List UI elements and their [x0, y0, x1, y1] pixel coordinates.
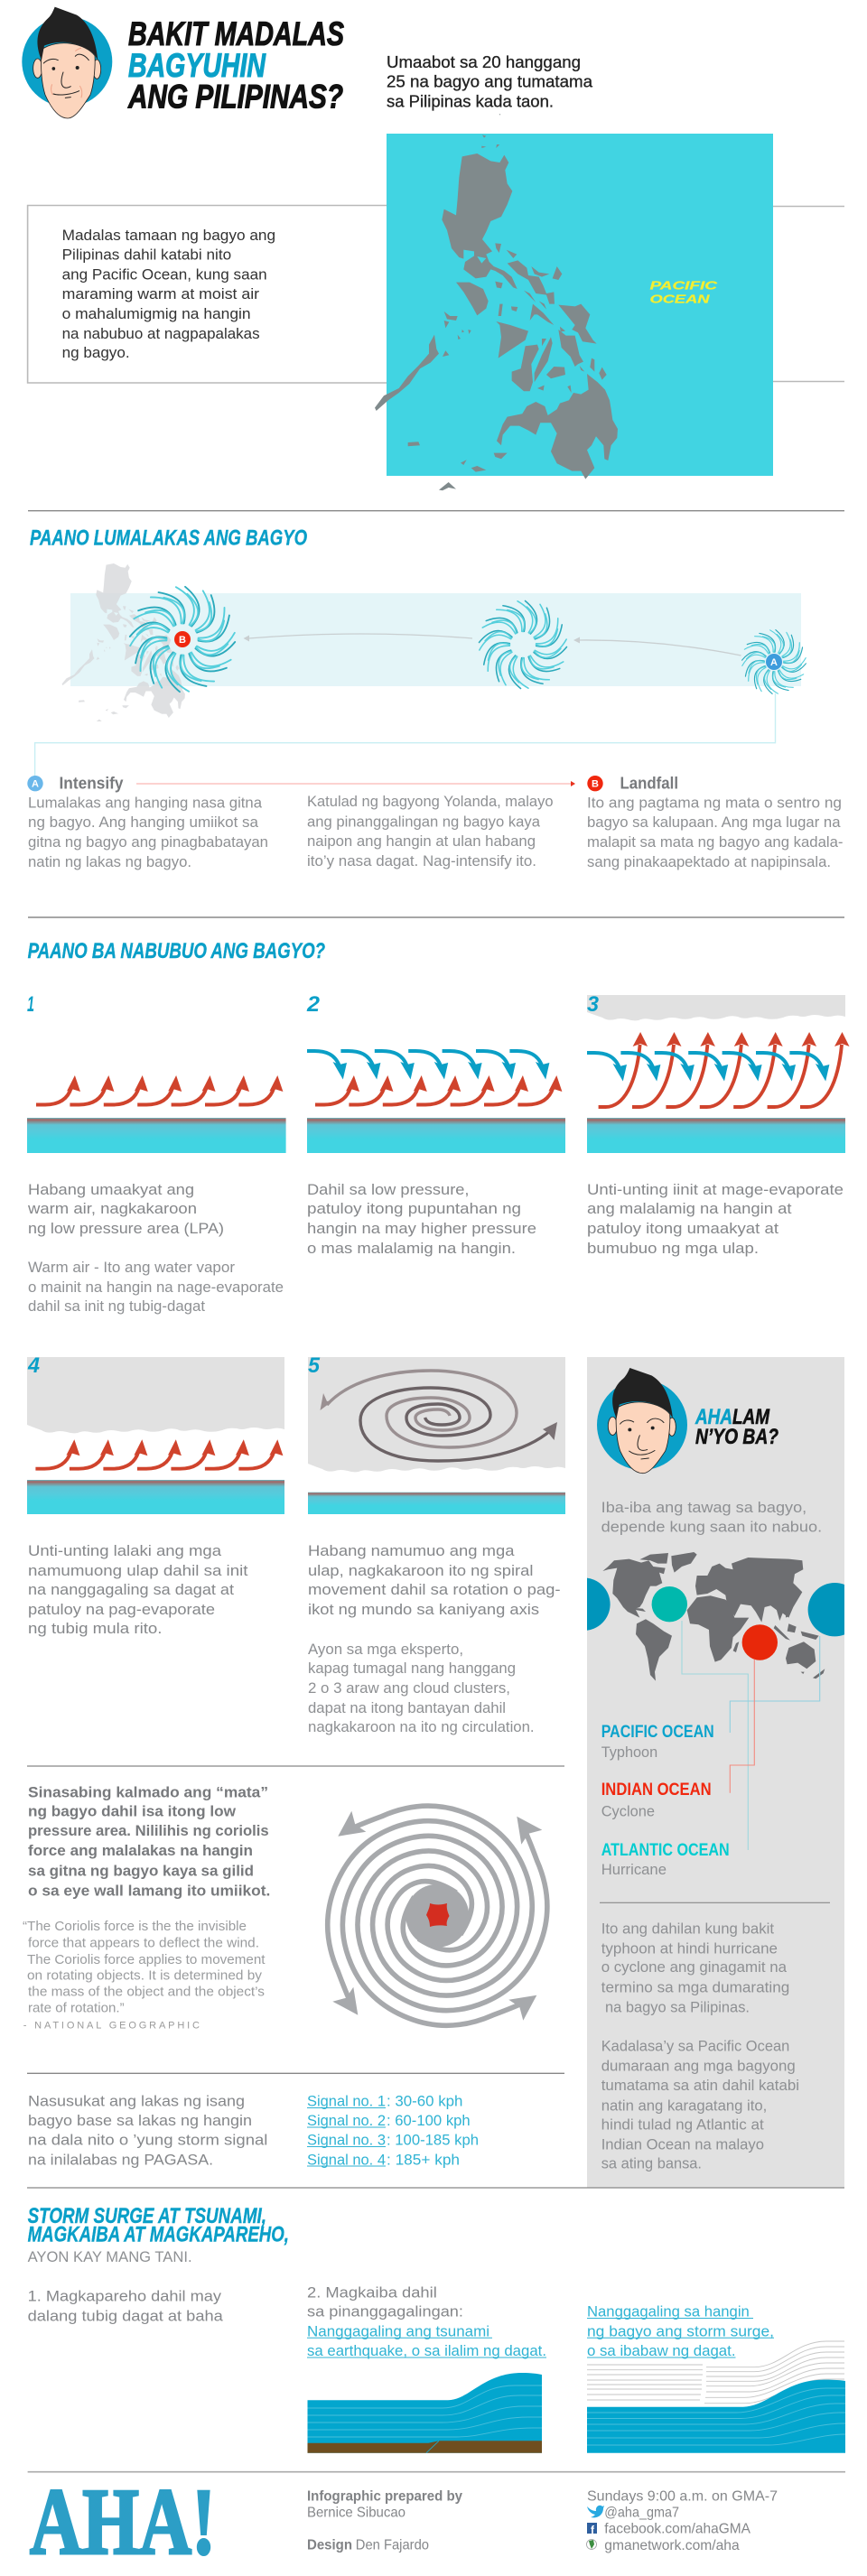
text: step 3: ang malalamig na hangin at — [587, 1200, 792, 1217]
list: signal numbers: Signal no. 3 — [307, 2132, 386, 2149]
text: difference: 2. Magkaiba dahil — [307, 2283, 437, 2301]
panel: explanation box outline — [28, 206, 844, 383]
map: world — [602, 1552, 825, 1681]
text: storm surge origin: o sa ibabaw ng dagat. — [587, 2342, 735, 2359]
intro text: typhoon count — [387, 53, 593, 110]
heading: storm surge and tsunami: STORM SURGE AT TSUNAMI, — [28, 2204, 266, 2228]
list: signal numbers: Signal no. 1 — [307, 2093, 386, 2110]
text: Yolanda: naipon ang hangin at ulan habang — [307, 832, 536, 850]
intro text: typhoon count: Umaabot sa 20 hanggang — [387, 53, 581, 71]
text: step 2: Dahil sa low pressure, — [307, 1181, 470, 1198]
number 3: 3 — [587, 992, 600, 1017]
text: why typhoon: termino sa mga dumarating — [601, 1979, 789, 1996]
text: why Philippines is hit: ang Pacific Ocean, kung saan — [62, 265, 267, 284]
icon: facebook: f — [591, 2524, 595, 2536]
text: storm signal intro: na inilalabas ng PAGASA. — [28, 2151, 213, 2168]
ocean markers — [587, 1578, 844, 1660]
text: step 3: Unti-unting iinit at mage-evaporate — [587, 1181, 844, 1198]
step 2 diagram — [307, 1051, 565, 1153]
text: step 1: Warm air - Ito ang water vapor — [28, 1259, 235, 1276]
text: why typhoon: natin ang karagatang ito, — [601, 2097, 767, 2114]
text: why Philippines is hit: ng bagyo. — [62, 344, 130, 361]
arrows: storm movement — [244, 634, 741, 656]
text: intensify: gitna ng bagyo ang pinagbabatayan — [28, 833, 268, 851]
text: step 5: ikot ng mundo sa kaniyang axis — [308, 1601, 539, 1618]
text: why typhoon: na bagyo sa Pilipinas. — [605, 1998, 750, 2015]
text: step 5: 2 o 3 araw ang cloud clusters, — [308, 1679, 510, 1697]
text: eye of the storm: o sa eye wall lamang ito umiikot. — [28, 1882, 270, 1899]
text: intensify — [28, 795, 268, 870]
text: landfall — [587, 795, 844, 870]
swirl: middle stage — [478, 600, 568, 690]
swirl: intensify stage — [741, 628, 807, 695]
text: Yolanda: Katulad ng bagyong Yolanda, malayo — [307, 793, 553, 810]
number 5: 5 — [308, 1353, 321, 1378]
step 4 diagram — [27, 1357, 284, 1514]
text: why Philippines is hit: Pilipinas dahil katabi nito — [62, 246, 231, 264]
text: why typhoon: Kadalasa’y sa Pacific Ocean — [601, 2038, 789, 2055]
leader lines — [682, 1621, 820, 1850]
text: step 5: nagkakaroon na ito ng circulation. — [308, 1718, 535, 1735]
icon: facebook — [587, 2523, 597, 2536]
text: storm surge origin: Nanggagaling sa hangin — [587, 2303, 750, 2320]
connector line — [35, 693, 776, 777]
text: step 2: patuloy itong pupuntahan ng — [307, 1200, 521, 1217]
heading: storm surge and tsunami: MAGKAIBA AT MAGKAPAREHO, — [28, 2223, 289, 2247]
text: eye of the storm: sa gitna ng bagyo kaya sa gilid — [28, 1862, 254, 1879]
panel: Ahalam n'yo ba sidebar — [587, 1357, 844, 2187]
text: step 1: o mainit na hangin na nage-evaporate — [28, 1279, 284, 1296]
text: intensify: Lumalakas ang hanging nasa gitna — [28, 795, 263, 811]
title: BAKIT MADALAS — [128, 15, 344, 52]
label: B Landfall: B — [592, 779, 599, 790]
text: similarity — [28, 2287, 223, 2325]
text: eye of the storm: force ang malalakas na hangin — [28, 1842, 253, 1859]
map: Philippines on Pacific Ocean: OCEAN — [650, 293, 711, 305]
heading: Paano lumalakas: PAANO LUMALAKAS ANG BAGYO — [30, 525, 307, 551]
text: step 5: dapat na itong bantayan dahil — [308, 1699, 506, 1716]
credits: Bernice Sibucao — [307, 2505, 406, 2520]
legend: oceans and storm names: Cyclone — [601, 1803, 655, 1820]
storm eye — [426, 1903, 450, 1927]
text: step 5: ulap, nagkakaroon ito ng spiral — [308, 1562, 533, 1579]
text: step 4 — [28, 1542, 248, 1637]
chart: tsunami cross-section — [307, 2373, 542, 2453]
wind lines — [587, 2341, 844, 2404]
step 5 diagram — [308, 1357, 565, 1514]
title: Ahalam n'yo ba: AHA — [695, 1405, 732, 1429]
text: step 1: dahil sa init ng tubig-dagat — [28, 1297, 205, 1315]
text: storm signal intro: bagyo base sa lakas ng hangin — [28, 2112, 252, 2129]
quote: National Geographic: - NATIONAL GEOGRAPHIC — [23, 2021, 200, 2032]
text: difference: Nanggagaling ang tsunami — [307, 2322, 489, 2339]
logo: AHA!: AHA! — [30, 2469, 216, 2574]
text: names differ — [601, 1499, 822, 1536]
legend: oceans and storm names: Hurricane — [601, 1861, 667, 1878]
text: storm surge origin: ng bagyo ang storm surge, — [587, 2322, 774, 2339]
text: step 1 — [27, 1181, 284, 1315]
legend: oceans and storm names: PACIFIC OCEAN — [601, 1723, 714, 1742]
text: why typhoon: hindi tulad ng Atlantic at — [601, 2116, 764, 2133]
track diagram: typhoon path — [61, 563, 806, 721]
text: why Philippines is hit: na nabubuo at nagpapalakas — [62, 325, 260, 342]
credits: Den Fajardo — [356, 2537, 429, 2553]
text: eye of the storm: ng bagyo dahil isa itong low — [28, 1803, 237, 1820]
text: why typhoon — [601, 1920, 799, 2172]
credits: Design — [307, 2537, 352, 2553]
text: names differ: depende kung saan ito nabuo. — [601, 1519, 822, 1536]
legend: oceans and storm names: INDIAN OCEAN — [601, 1781, 712, 1799]
intro text: typhoon count: sa Pilipinas kada taon. — [387, 92, 554, 110]
show and social links — [587, 2488, 778, 2553]
text: storm signal intro — [28, 2093, 267, 2168]
quote: National Geographic: force that appears to deflect the wind. — [28, 1937, 259, 1951]
text: eye of the storm — [28, 1784, 270, 1899]
title: BAGYUHIN — [128, 47, 266, 84]
text: storm signal intro: Nasusukat ang lakas ng isang — [28, 2093, 245, 2110]
text: Yolanda: ang pinanggalingan ng bagyo kaya — [307, 813, 541, 831]
text: similarity: 1. Magkapareho dahil may — [28, 2287, 222, 2304]
avatar: smiling host face — [597, 1368, 687, 1474]
quote: National Geographic: the mass of the object and the object’s — [28, 1985, 265, 2000]
list: signal numbers: : 185+ kph — [387, 2151, 460, 2168]
show and social links: facebook.com/ahaGMA — [604, 2521, 750, 2536]
text: step 3: patuloy itong umaakyat at — [587, 1220, 778, 1237]
text: step 4: ng tubig mula rito. — [28, 1620, 163, 1637]
text: eye of the storm: pressure area. Nililihis ng coriolis — [28, 1822, 269, 1839]
icon: globe — [587, 2539, 596, 2550]
icon: twitter — [587, 2506, 604, 2517]
quote: National Geographic: rate of rotation.” — [28, 2002, 125, 2016]
chart: storm surge cross-section — [587, 2341, 845, 2453]
avatar: worried host face — [22, 7, 112, 118]
text: why typhoon: dumaraan ang mga bagyong — [601, 2057, 796, 2074]
map: Philippines on Pacific Ocean: PACIFIC — [650, 280, 718, 293]
heading: Paano nabubuo: PAANO BA NABUBUO ANG BAGYO? — [28, 939, 325, 963]
heading: storm surge and tsunami: AYON KAY MANG TANI. — [28, 2248, 192, 2265]
title: Ahalam n'yo ba: N’YO BA? — [695, 1425, 778, 1449]
text: why Philippines is hit: maraming warm at moist air — [62, 285, 259, 302]
text: step 4: na nanggagaling sa dagat at — [28, 1581, 234, 1598]
text: eye of the storm: Sinasabing kalmado ang “mata” — [28, 1784, 268, 1801]
quote: National Geographic: on rotating objects. It is determined by — [27, 1969, 263, 1984]
step 1 diagram — [27, 1075, 286, 1153]
text: step 5: Ayon sa mga eksperto, — [308, 1641, 463, 1658]
quote: National Geographic: “The Coriolis force is the the invisible — [23, 1920, 247, 1934]
quote: National Geographic — [23, 1920, 266, 2032]
list: signal numbers: : 100-185 kph — [387, 2132, 479, 2149]
text: step 4: namumuong ulap dahil sa init — [28, 1562, 248, 1579]
text: why typhoon: tumatama sa atin dahil katabi — [601, 2077, 799, 2094]
text: names differ: Iba-iba ang tawag sa bagyo, — [601, 1499, 806, 1516]
text: why typhoon: o cyclone ang ginagamit na — [601, 1958, 788, 1976]
list: signal numbers: Signal no. 2 — [307, 2112, 386, 2129]
list: signal numbers: : 60-100 kph — [387, 2112, 471, 2129]
number 1: 1 — [27, 992, 34, 1017]
text: difference: sa pinanggagalingan: — [307, 2303, 463, 2320]
text: step 5: kapag tumagal nang hanggang — [308, 1660, 516, 1677]
text: why typhoon: Ito ang dahilan kung bakit — [601, 1920, 774, 1938]
seabed with fault — [307, 2441, 542, 2453]
text: step 3: bumubuo ng mga ulap. — [587, 1240, 759, 1257]
text: landfall: sang pinakaapektado at napipinsala. — [587, 853, 831, 870]
heading: storm surge and tsunami — [28, 2204, 289, 2265]
swirl: landfall stage: B — [179, 635, 186, 646]
map: Philippines on Pacific Ocean — [375, 114, 773, 490]
text: step 2: o mas malalamig na hangin. — [307, 1240, 516, 1257]
text: why Philippines is hit: Madalas tamaan ng bagyo ang — [62, 227, 275, 244]
label: A Intensify: A — [32, 779, 39, 790]
label: B Landfall: Landfall — [620, 775, 678, 793]
label: B Landfall — [587, 775, 678, 793]
arrow: intensify to landfall — [136, 781, 575, 786]
show and social links: Sundays 9:00 a.m. on GMA-7 — [587, 2488, 778, 2504]
swirl: landfall stage — [127, 584, 238, 694]
title — [127, 15, 344, 116]
text: step 1: Habang umaakyat ang — [28, 1181, 194, 1198]
text: step 5: movement dahil sa rotation o pag- — [308, 1581, 561, 1598]
spiral: dark arm — [360, 1388, 557, 1461]
text: why Philippines is hit: o mahalumigmig na hangin — [62, 305, 251, 322]
intro text: typhoon count: 25 na bagyo ang tumatama — [387, 72, 593, 90]
text: step 1: warm air, nagkakaroon — [27, 1200, 197, 1217]
legend: oceans and storm names: Typhoon — [601, 1744, 657, 1761]
legend: oceans and storm names — [601, 1723, 730, 1878]
text: difference — [307, 2283, 546, 2359]
text: difference: sa earthquake, o sa ilalim ng dagat. — [307, 2342, 546, 2359]
list: signal numbers: : 30-60 kph — [387, 2093, 462, 2110]
title: Ahalam n'yo ba: LAM — [732, 1405, 770, 1429]
number 4: 4 — [27, 1353, 40, 1378]
text: storm surge origin — [587, 2303, 774, 2359]
legend: oceans and storm names: ATLANTIC OCEAN — [601, 1841, 730, 1860]
list: signal numbers — [307, 2093, 479, 2168]
map: faded Philippines — [61, 563, 185, 721]
show and social links: @aha_gma7 — [604, 2505, 679, 2520]
text: step 2 — [307, 1181, 536, 1257]
number 2: 2 — [306, 992, 321, 1017]
text: landfall: Ito ang pagtama ng mata o sentro ng — [587, 795, 842, 811]
text: why Philippines is hit — [62, 227, 275, 361]
text: step 3 — [587, 1181, 844, 1257]
text: step 2: hangin na may higher pressure — [307, 1220, 536, 1237]
text: why typhoon: sa ating bansa. — [601, 2155, 702, 2172]
text: landfall: malapit sa mata ng bagyo ang kadala- — [587, 833, 844, 851]
text: storm signal intro: na dala nito o ’yung storm signal — [28, 2132, 267, 2149]
credits — [307, 2488, 462, 2553]
text: why typhoon: typhoon at hindi hurricane — [601, 1939, 778, 1957]
swirl: intensify stage: A — [770, 657, 778, 668]
title: Ahalam n'yo ba — [695, 1405, 778, 1449]
text: step 4: Unti-unting lalaki ang mga — [28, 1542, 222, 1559]
credits: Infographic prepared by — [307, 2488, 462, 2504]
label: A Intensify — [27, 775, 123, 793]
text: Yolanda — [307, 793, 553, 870]
text: Yolanda: ito’y nasa dagat. Nag-intensify ito. — [307, 852, 536, 870]
step 3 diagram — [587, 995, 849, 1153]
text: step 4: patuloy na pag-evaporate — [28, 1601, 215, 1618]
show and social links: gmanetwork.com/aha — [604, 2538, 740, 2553]
text: why typhoon: Indian Ocean na malayo — [601, 2136, 764, 2153]
text: step 5 — [308, 1542, 561, 1735]
title: ANG PILIPINAS? — [127, 78, 343, 116]
text: step 1: ng low pressure area (LPA) — [28, 1220, 224, 1237]
text: intensify: natin ng lakas ng bagyo. — [28, 853, 191, 870]
text: step 5: Habang namumuo ang mga — [308, 1542, 515, 1559]
text: intensify: ng bagyo. Ang hanging umiikot sa — [28, 814, 259, 831]
text: similarity: dalang tubig dagat at baha — [28, 2308, 223, 2325]
spiral: light arm — [320, 1371, 517, 1447]
text: landfall: bagyo sa kalupaan. Ang mga lugar na — [587, 814, 841, 831]
spiral diagram: coriolis — [328, 1806, 547, 2025]
label: A Intensify: Intensify — [60, 775, 123, 793]
quote: National Geographic: The Coriolis force applies to movement — [27, 1953, 266, 1967]
list: signal numbers: Signal no. 4 — [307, 2151, 386, 2168]
